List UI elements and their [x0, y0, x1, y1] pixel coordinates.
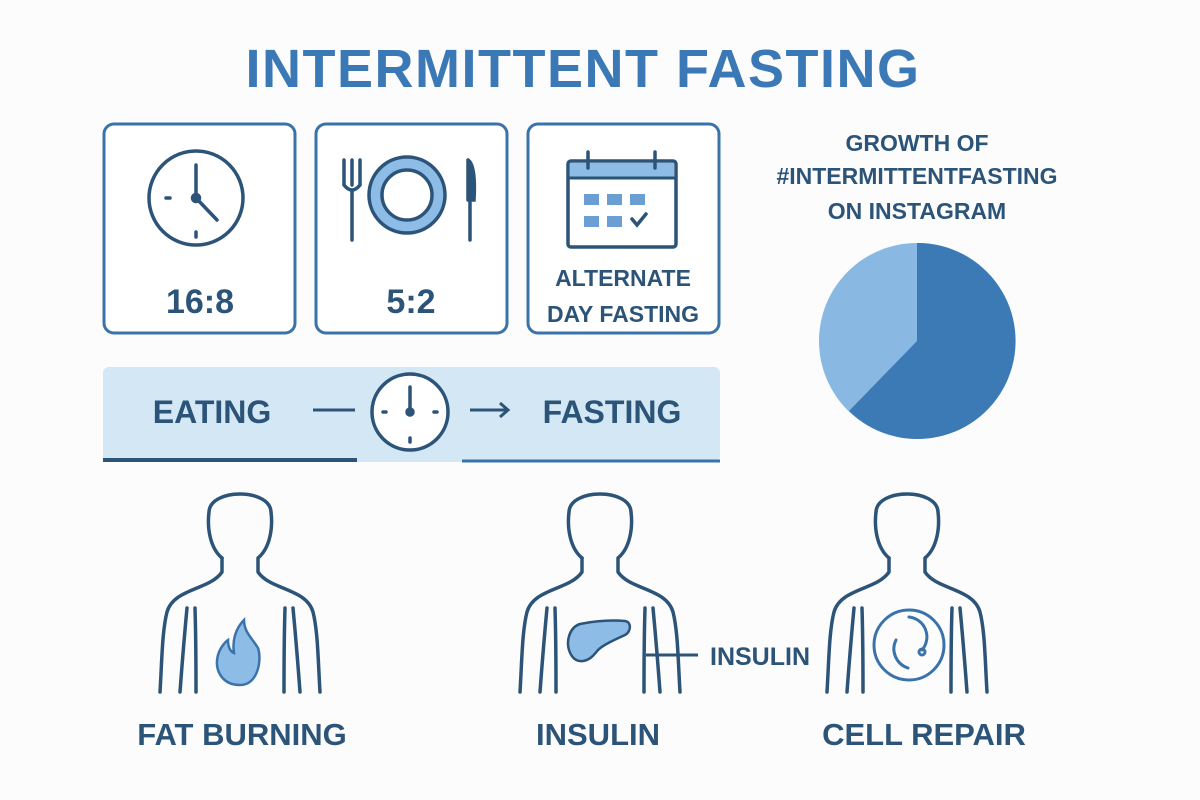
panel: alternate day fasting: DAY FASTING	[547, 301, 699, 327]
icon: cell	[874, 610, 944, 680]
label: CELL REPAIR	[822, 717, 1026, 752]
label: INSULIN	[536, 717, 660, 752]
panel: alternate day fasting	[528, 124, 719, 333]
icon: clock	[149, 151, 243, 245]
band: eating to fasting	[103, 367, 720, 462]
pie chart title: #INTERMITTENTFASTING	[776, 163, 1058, 189]
icon: clock	[372, 374, 448, 450]
pie chart	[819, 243, 1016, 439]
pie chart title: GROWTH OF	[845, 130, 989, 156]
arrow	[470, 403, 508, 417]
label 5:2: 5:2	[386, 283, 436, 321]
label 16:8: 16:8	[166, 283, 234, 321]
icon: calendar	[568, 152, 676, 247]
label: FAT BURNING	[137, 717, 347, 752]
icon: plate and cutlery	[344, 157, 474, 240]
person: cell repair	[822, 494, 1026, 752]
panel: 16:8	[104, 124, 295, 333]
person: insulin	[520, 494, 810, 752]
icon: liver	[568, 621, 630, 661]
text: fasting: FASTING	[543, 394, 681, 430]
person: fat burning	[137, 494, 347, 752]
person: insulin: INSULIN	[710, 643, 810, 671]
panel: 5:2	[316, 124, 507, 333]
pie chart title	[776, 130, 1058, 224]
label: ALTERNATE	[555, 265, 691, 291]
pie chart title: ON INSTAGRAM	[828, 198, 1006, 224]
text: eating: EATING	[153, 394, 271, 430]
callout: insulin	[646, 654, 698, 656]
icon: flame	[217, 620, 259, 685]
title: INTERMITTENT FASTING	[246, 39, 920, 99]
